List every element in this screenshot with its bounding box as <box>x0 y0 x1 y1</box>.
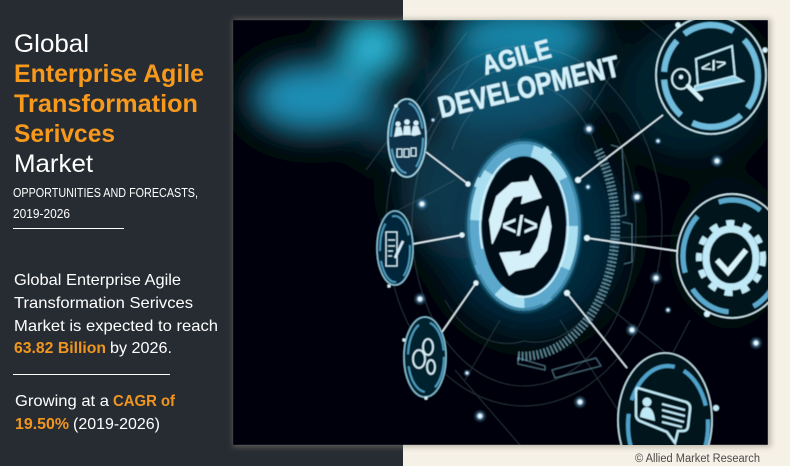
title: Market <box>14 150 93 178</box>
image drop shadow <box>233 19 771 447</box>
icon: laptop and magnifier <box>656 16 768 134</box>
title: Transformation <box>14 90 198 118</box>
text block: CAGR: Growing at a <box>15 393 109 410</box>
glowing light points <box>413 117 763 423</box>
tick arc <box>518 150 615 356</box>
text block: market forecast: by 2026. <box>110 340 172 357</box>
text block: market forecast: Market is expected to reach <box>14 318 218 335</box>
text block: market forecast: Global Enterprise Agile <box>14 272 181 289</box>
icon: gear with check <box>675 192 768 320</box>
title: Global <box>14 30 89 58</box>
icon: gears <box>402 317 446 400</box>
connector lines <box>413 115 677 368</box>
icon: profile chat card <box>616 351 720 445</box>
text block: market forecast <box>14 272 218 357</box>
title: Serivces <box>14 120 115 148</box>
technical background lines <box>365 20 691 445</box>
panel: cream right background <box>403 0 790 466</box>
text block: CAGR <box>15 393 176 433</box>
text block: market forecast: Transformation Serivces <box>14 295 193 312</box>
title <box>14 30 204 178</box>
icon: document <box>377 211 413 288</box>
heading: agile development: DEVELOPMENT <box>435 50 623 125</box>
text block: CAGR: CAGR of <box>113 393 176 410</box>
icon: laptop and magnifier: </> <box>699 54 728 76</box>
subtitle: 2019-2026 <box>13 207 70 221</box>
text block: CAGR: (2019-2026) <box>73 416 160 433</box>
central hub icon: </> <box>502 210 538 241</box>
title: Enterprise Agile <box>14 60 204 88</box>
blurred blue haze <box>250 7 780 335</box>
heading: agile development: AGILE <box>479 34 554 81</box>
subtitle: OPPORTUNITIES AND FORECASTS, <box>13 186 198 200</box>
icon: people <box>388 99 426 177</box>
panel: dark left background <box>0 0 403 466</box>
text block: CAGR: 19.50% <box>15 416 69 433</box>
subtitle <box>13 186 198 221</box>
text block: market forecast: 63.82 Billion <box>14 340 106 357</box>
central hub icon <box>465 139 583 313</box>
image: agile development illustration <box>233 20 768 445</box>
copyright note: © Allied Market Research <box>635 453 760 465</box>
